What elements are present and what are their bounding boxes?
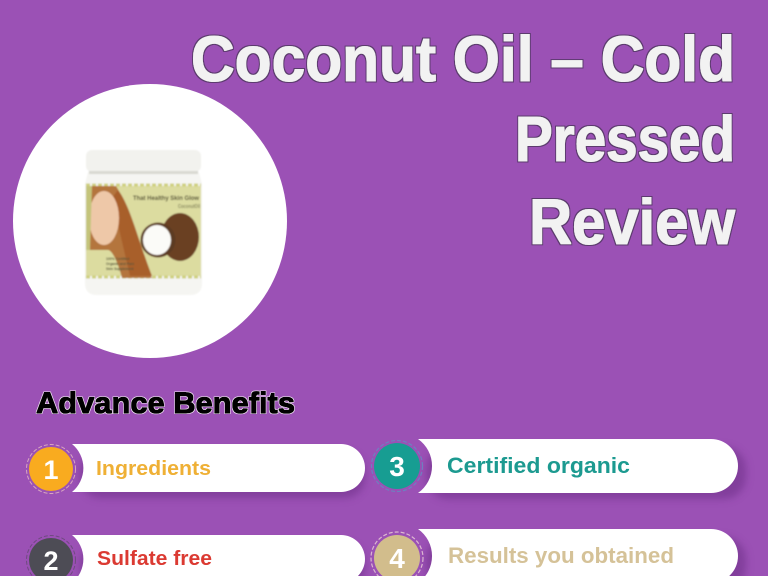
item 4: Results you obtained (371, 529, 746, 576)
item 1: Ingredients (26, 444, 365, 498)
title: Coconut Oil – Cold (191, 23, 735, 95)
title: Pressed (515, 103, 735, 175)
item 2: Sulfate free: 2 (43, 546, 59, 576)
icon: coconut oil jar: CoconutOil (178, 204, 200, 210)
item 2: Sulfate free (26, 535, 365, 576)
item 4: Results you obtained: Results you obtained (448, 543, 674, 568)
icon: coconut oil jar: Skin Supplement (106, 267, 134, 271)
title (191, 23, 735, 258)
icon: coconut oil jar: Organic and Pure (106, 262, 134, 266)
item 2: Sulfate free: Sulfate free (97, 548, 212, 570)
heading: Advance Benefits: Advance Benefits (36, 387, 295, 420)
item 1: Ingredients: 1 (43, 455, 59, 485)
item 3: Certified organic (372, 439, 746, 499)
item 1: Ingredients: Ingredients (96, 458, 211, 480)
product image circle (13, 84, 287, 358)
item 3: Certified organic: 3 (389, 451, 405, 482)
jar label text: That Healthy Skin Glow (133, 196, 199, 202)
item 3: Certified organic: Certified organic (447, 453, 630, 478)
icon: coconut oil jar (85, 150, 202, 295)
item 4: Results you obtained: 4 (389, 543, 405, 574)
icon: coconut oil jar: 100% Certified (106, 257, 129, 261)
title: Review (529, 186, 735, 258)
